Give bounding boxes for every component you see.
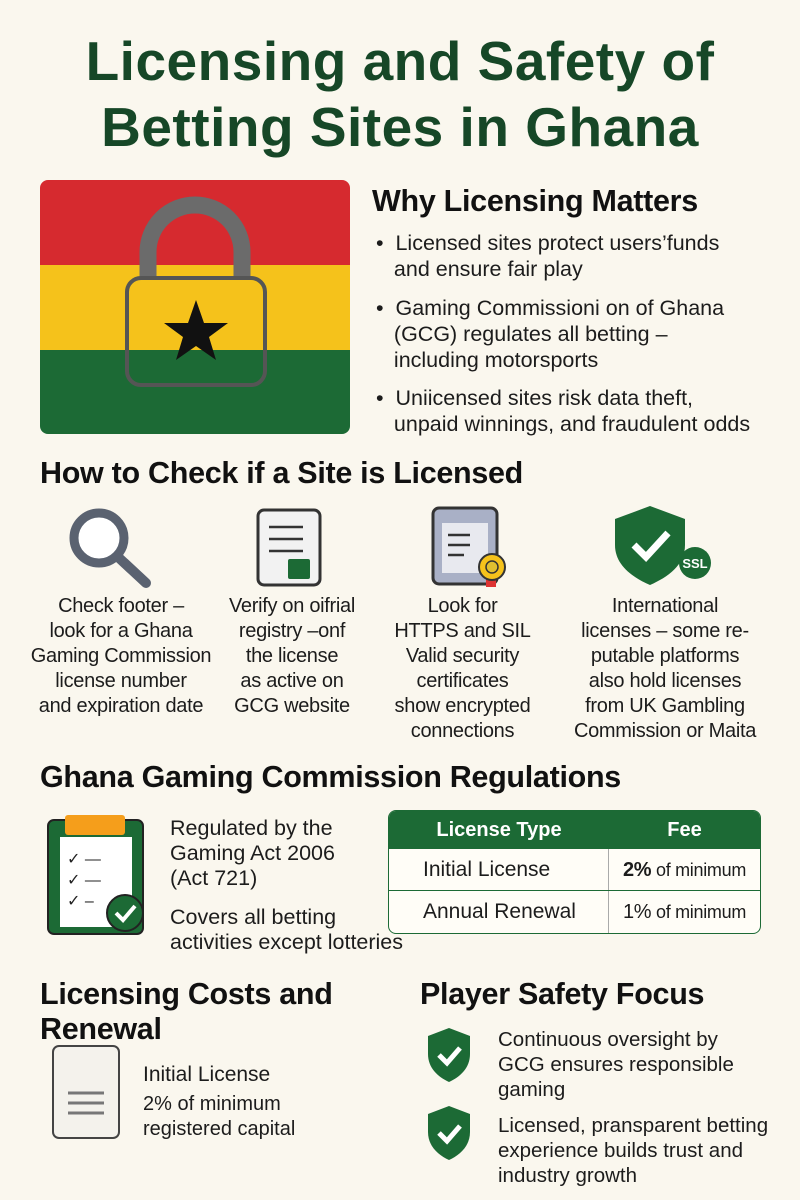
step texts: and expiration date [39, 695, 203, 717]
icon: shield SSL [615, 506, 711, 585]
text: Verify on oifrial [229, 595, 355, 617]
safety item 1: GCG ensures responsible [498, 1053, 734, 1076]
heading: licensing costs: Licensing Costs and [40, 977, 333, 1011]
heading: licensing costs: Renewal [40, 1012, 162, 1046]
regulation text: activities except lotteries [170, 930, 403, 954]
text: also hold licenses [589, 670, 741, 692]
icon: cost document [52, 1045, 120, 1139]
bullets: • Uniicensed sites risk data theft, [376, 386, 693, 410]
table: license fees: Fee [667, 819, 702, 841]
cost text: Initial License [143, 1063, 270, 1086]
table: license fees [388, 810, 761, 934]
heading: why licensing matters: Why Licensing Matters [372, 184, 698, 218]
step texts: look for a Ghana [49, 620, 193, 642]
bullets: unpaid winnings, and fraudulent odds [394, 412, 750, 436]
icon: certificate [432, 506, 506, 587]
icon: document [256, 508, 322, 586]
text: putable platforms [591, 645, 739, 667]
text: connections [411, 720, 514, 742]
step texts: license number [55, 670, 187, 692]
safety item 2: experience builds trust and [498, 1139, 743, 1162]
table: license fees: 1% of minimum [623, 901, 746, 923]
cost text: 2% of minimum [143, 1093, 281, 1115]
cost text: registered capital [143, 1118, 295, 1140]
bullets: including motorsports [394, 348, 598, 372]
heading: how to check: How to Check if a Site is Licensed [40, 456, 523, 490]
bullets: (GCG) regulates all betting – [394, 322, 668, 346]
regulation text: (Act 721) [170, 866, 257, 890]
flag with padlock [40, 180, 350, 434]
text: registry –onf [239, 620, 345, 642]
safety item 2 [428, 1106, 768, 1187]
icon: clipboard: ✓ — [67, 872, 101, 889]
safety item 1: gaming [498, 1078, 565, 1101]
title [86, 30, 714, 158]
icon: shield SSL: SSL [682, 556, 708, 571]
text: show encrypted [395, 695, 530, 717]
text: licenses – some re- [581, 620, 749, 642]
text: from UK Gambling [585, 695, 745, 717]
bullets: • Licensed sites protect users’funds [376, 231, 719, 255]
step texts [31, 595, 211, 717]
regulation text [170, 816, 403, 954]
text: GCG website [234, 695, 350, 717]
table: license fees: 2% of minimum [623, 859, 746, 881]
heading: licensing costs [40, 977, 333, 1046]
icon: clipboard: ✓ – [67, 893, 94, 910]
text: Commission or Maita [574, 720, 756, 742]
table: license fees: License Type [436, 819, 562, 841]
text: Look for [428, 595, 497, 617]
title: Betting Sites in Ghana [101, 96, 699, 158]
safety item 1: Continuous oversight by [498, 1028, 718, 1051]
text: certificates [416, 670, 508, 692]
title: Licensing and Safety of [86, 30, 714, 92]
text: the license [246, 645, 338, 667]
safety item 2: Licensed, pransparent betting [498, 1114, 768, 1137]
text: as active on [240, 670, 344, 692]
safety item 2: industry growth [498, 1164, 637, 1187]
icon: clipboard: ✓ — [67, 851, 101, 868]
heading: regulations: Ghana Gaming Commission Regulations [40, 760, 621, 794]
table: license fees: Initial License [423, 858, 550, 881]
regulation text: Regulated by the [170, 816, 333, 840]
heading: player safety: Player Safety Focus [420, 977, 704, 1011]
regulation text: Gaming Act 2006 [170, 841, 335, 865]
cost text [143, 1063, 295, 1140]
bullets: • Gaming Commissioni on of Ghana [376, 296, 724, 320]
icon: clipboard [47, 815, 144, 935]
table: license fees: Annual Renewal [423, 900, 576, 923]
step texts: Gaming Commission [31, 645, 211, 667]
icon: magnifier [70, 508, 151, 588]
step texts: Check footer – [58, 595, 184, 617]
bullets [376, 231, 750, 436]
text: Valid security [406, 645, 519, 667]
regulation text: Covers all betting [170, 905, 336, 929]
text: International [612, 595, 718, 617]
text: HTTPS and SIL [394, 620, 531, 642]
safety item 1 [428, 1028, 734, 1101]
bullets: and ensure fair play [394, 257, 583, 281]
